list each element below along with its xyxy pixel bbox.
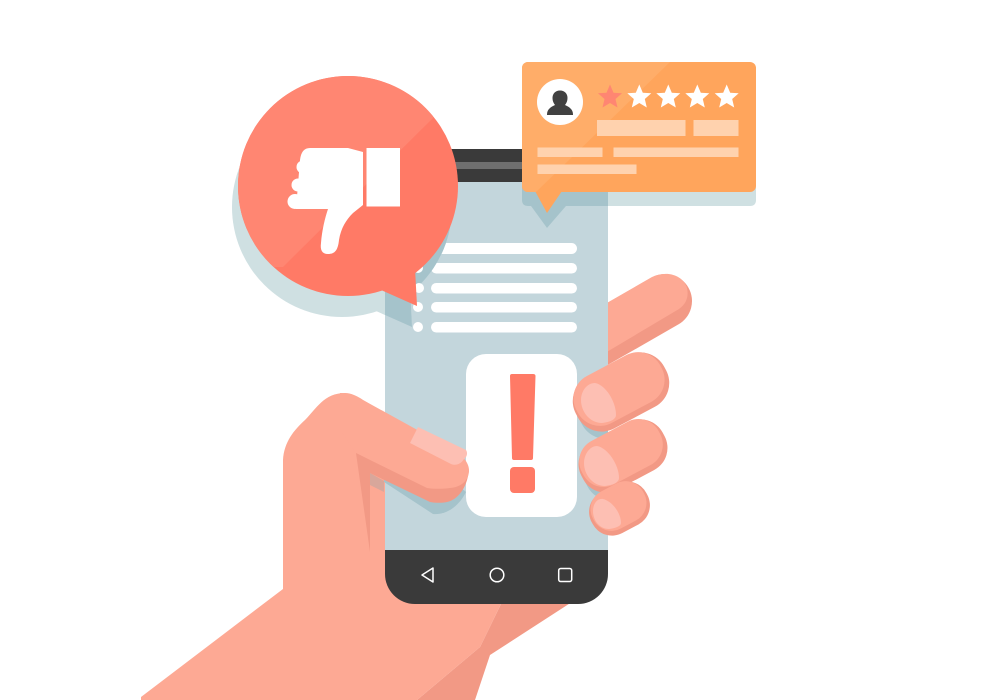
text lines on screen: [400, 243, 577, 332]
alert card: [466, 354, 577, 517]
illustration: hand holding phone with negative review: [141, 62, 756, 700]
little finger: [581, 474, 658, 543]
hand: wrist shadow side: [417, 600, 575, 700]
phone top stripe: [440, 162, 608, 169]
thumb top: [340, 393, 469, 489]
finger nail: [593, 499, 621, 529]
thumb nail: [410, 427, 467, 465]
bubble base: [238, 76, 458, 296]
hand: palm: [141, 393, 503, 700]
icon: thumbs down: [288, 148, 400, 254]
review card: [522, 62, 756, 213]
thumb crease and underside: [356, 440, 469, 552]
fingers shadow on screen: [580, 421, 608, 496]
phone: [385, 149, 608, 604]
card highlight: [522, 62, 670, 192]
bubble shadow: [232, 168, 450, 327]
bubble highlight: [238, 76, 433, 267]
finger nail: [584, 446, 619, 486]
card tail: [535, 191, 562, 213]
finger nail: [581, 383, 616, 423]
avatar: [537, 79, 583, 125]
star rating: one of five: [598, 84, 739, 108]
thumbs-down speech bubble: [238, 76, 458, 306]
ring finger: [570, 411, 676, 501]
review card shadow: [522, 185, 756, 228]
icon: back: [422, 568, 433, 582]
thumb: [340, 393, 469, 552]
icon: home: [490, 568, 504, 582]
phone navigation bar: [385, 550, 608, 604]
exclamation mark: [510, 374, 536, 493]
card base: [522, 62, 756, 192]
middle finger: [563, 343, 679, 441]
phone screen: [385, 182, 608, 551]
phone body: [385, 149, 608, 209]
review text placeholders: [538, 120, 738, 174]
index finger behind phone: [590, 274, 688, 356]
list bullets: [413, 263, 424, 332]
thumb shadow on screen: [370, 470, 466, 514]
bubble tail: [381, 268, 417, 306]
icon: recent apps: [559, 568, 572, 582]
